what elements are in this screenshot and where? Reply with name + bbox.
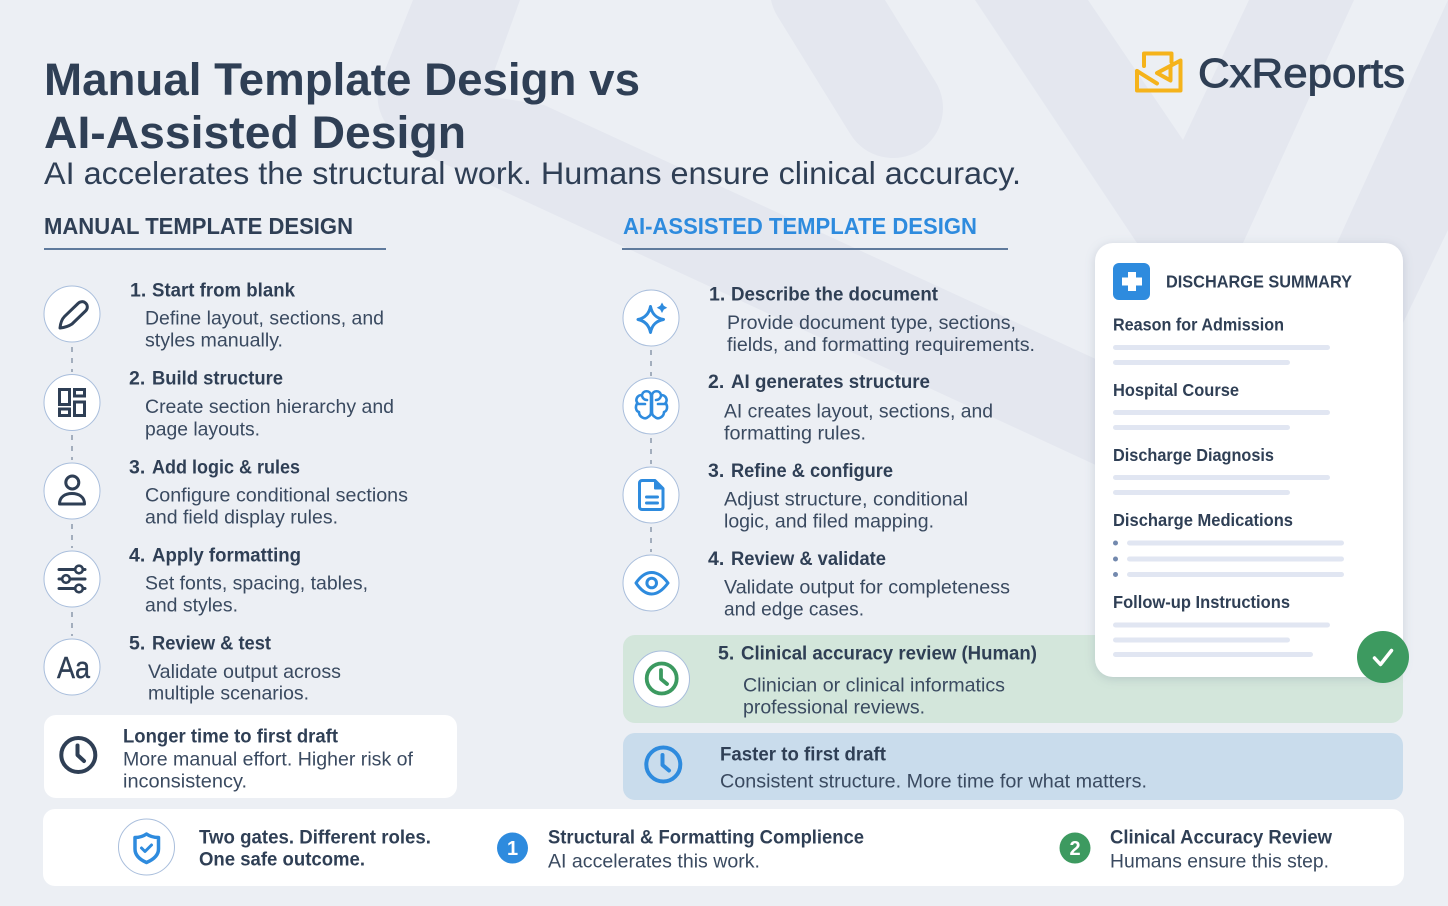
step 2: build structure: Build structure: [152, 367, 283, 389]
title: [44, 54, 640, 158]
step 4: apply formatting: 4.: [129, 544, 145, 566]
step 5: clinical accuracy review panel: Clinician or clinical informatics: [743, 674, 1005, 696]
step 3: refine and configure: 3.: [708, 460, 724, 482]
icon: green check badge: [1357, 631, 1409, 683]
panel: discharge summary document: [1095, 243, 1409, 683]
icon: medical cross: [1113, 263, 1150, 300]
step 5: clinical accuracy review panel: [623, 635, 1403, 723]
step 1: describe the document: 1.: [709, 283, 725, 305]
section: reason for admission: Reason for Admission: [1113, 314, 1284, 334]
step 1: start from blank: [44, 279, 384, 352]
gate 2: [1060, 826, 1333, 872]
callout: longer time to first draft: inconsistency.: [123, 770, 247, 792]
icon: person: [44, 463, 100, 519]
icon: typography: Aa: [57, 650, 91, 685]
callout: faster to first draft: [623, 733, 1403, 800]
step 1: start from blank: styles manually.: [145, 330, 283, 352]
step 5: review and test: multiple scenarios.: [148, 682, 309, 704]
gate 2: Clinical Accuracy Review: [1110, 826, 1333, 848]
icon: shield: [118, 819, 174, 875]
step 2: build structure: [44, 367, 394, 440]
step 3: add logic and rules: and field display rules.: [145, 506, 338, 528]
icon: green clock: [634, 651, 690, 707]
callout: longer time to first draft: More manual effort. Higher risk of: [123, 748, 414, 770]
panel: AI-assisted template design: [622, 213, 1403, 800]
icon: clock: [61, 738, 95, 772]
logo wordmark: CxReports: [1198, 50, 1405, 96]
panel: manual template design: [44, 213, 457, 798]
icon: typography: [44, 639, 100, 695]
AI heading: AI-ASSISTED TEMPLATE DESIGN: [623, 213, 977, 239]
gate 1: Structural & Formatting Complience: [548, 826, 864, 848]
step 2: AI generates structure: 2.: [708, 371, 724, 393]
manual heading: MANUAL TEMPLATE DESIGN: [44, 213, 353, 239]
icon: sliders: [44, 551, 100, 607]
step 4: apply formatting: Set fonts, spacing, tables,: [145, 572, 368, 594]
step 4: apply formatting: and styles.: [145, 594, 238, 616]
section: reason for admission: [1113, 314, 1330, 365]
gate 1: [497, 826, 864, 872]
logo: CxReports: [1137, 50, 1405, 96]
icon: layout: [44, 374, 100, 430]
gate 2: 2: [1069, 838, 1081, 860]
footer message: [199, 826, 431, 870]
section: discharge diagnosis: Discharge Diagnosis: [1113, 445, 1274, 465]
step 3: add logic and rules: 3.: [129, 456, 145, 478]
step 3: add logic and rules: Configure conditional sections: [145, 484, 408, 506]
step 5: clinical accuracy review panel: professional reviews.: [743, 696, 925, 718]
step 3: add logic and rules: Add logic & rules: [152, 456, 300, 478]
callout: longer time to first draft: Longer time to first draft: [123, 725, 338, 747]
step 2: AI generates structure: formatting rules.: [724, 422, 866, 444]
step 2: AI generates structure: [623, 371, 993, 444]
step 4: apply formatting: [44, 544, 368, 616]
step 1: describe the document: [623, 283, 1035, 356]
title: AI-Assisted Design: [44, 107, 466, 158]
step 1: start from blank: 1.: [130, 279, 146, 301]
icon: sparkle: [623, 290, 679, 346]
step 3: refine and configure: Refine & configure: [731, 460, 893, 482]
step 1: describe the document: Describe the document: [731, 283, 938, 305]
step 5: review and test: 5.: [129, 632, 145, 654]
section: hospital course: Hospital Course: [1113, 380, 1239, 400]
step 5: clinical accuracy review panel: Clinical accuracy review (Human): [741, 642, 1037, 664]
step 5: clinical accuracy review panel: 5.: [718, 642, 734, 664]
step 1: describe the document: Provide document type, sections,: [727, 312, 1016, 334]
section: discharge medications: Discharge Medications: [1113, 510, 1293, 530]
step 2: AI generates structure: AI creates layout, sections, and: [724, 400, 993, 422]
section: hospital course: [1113, 380, 1330, 430]
step 1: describe the document: fields, and formatting requirements.: [727, 334, 1035, 356]
step 4: review and validate: 4.: [708, 548, 724, 570]
step 4: review and validate: Validate output for completeness: [724, 576, 1010, 598]
step 2: build structure: 2.: [129, 367, 145, 389]
icon: blue clock: [646, 748, 680, 782]
icon: logo envelope: [1137, 54, 1180, 90]
icon: eye: [623, 555, 679, 611]
step 1: start from blank: Start from blank: [152, 279, 295, 301]
icon: pencil: [44, 286, 100, 342]
step 3: refine and configure: logic, and filed mapping.: [724, 510, 934, 532]
gate 1: 1: [507, 838, 518, 860]
panel: discharge summary document: DISCHARGE SUMMARY: [1166, 272, 1352, 292]
step 5: review and test: Review & test: [152, 632, 271, 654]
step 2: build structure: page layouts.: [145, 418, 260, 440]
step 3: refine and configure: [623, 460, 968, 532]
footer message: One safe outcome.: [199, 848, 365, 870]
step 3: refine and configure: Adjust structure, conditional: [724, 488, 968, 510]
step 4: review and validate: [623, 548, 1010, 620]
callout: faster to first draft: Consistent structure. More time for what matters.: [720, 770, 1147, 792]
step 4: review and validate: Review & validate: [731, 548, 886, 570]
title: Manual Template Design vs: [44, 54, 640, 105]
step 5: review and test: [44, 632, 341, 704]
section: follow-up instructions: [1113, 592, 1330, 657]
step 1: start from blank: Define layout, sections, and: [145, 308, 384, 330]
footer message: Two gates. Different roles.: [199, 826, 431, 848]
gate 1: AI accelerates this work.: [548, 850, 760, 872]
icon: brain: [623, 378, 679, 434]
gate 2: Humans ensure this step.: [1110, 850, 1329, 872]
panel: footer summary: [43, 809, 1404, 886]
step 2: AI generates structure: AI generates structure: [731, 371, 930, 393]
step 4: apply formatting: Apply formatting: [152, 544, 301, 566]
section: discharge medications: [1113, 510, 1344, 577]
section: follow-up instructions: Follow-up Instructions: [1113, 592, 1290, 612]
step 5: review and test: Validate output across: [148, 661, 341, 683]
callout: faster to first draft: Faster to first draft: [720, 743, 886, 765]
step 3: add logic and rules: [44, 456, 408, 528]
step 2: build structure: Create section hierarchy and: [145, 396, 394, 418]
callout: longer time to first draft: [44, 715, 457, 798]
step 4: review and validate: and edge cases.: [724, 598, 864, 620]
subtitle: AI accelerates the structural work. Humans ensure clinical accuracy.: [44, 155, 1021, 191]
icon: document: [623, 467, 679, 523]
section: discharge diagnosis: [1113, 445, 1330, 495]
